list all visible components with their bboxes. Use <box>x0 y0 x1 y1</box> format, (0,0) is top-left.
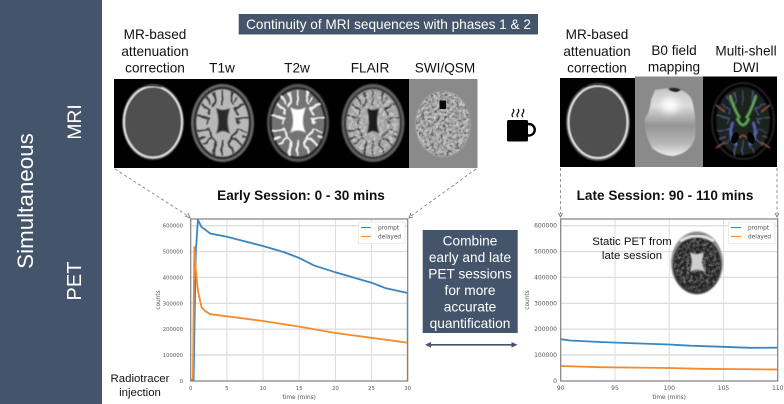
label: radiotracer injection <box>111 373 170 399</box>
late sequence labels: Multi-shell <box>715 44 777 58</box>
x axis ticks: 20 <box>332 386 339 392</box>
brain: FLAIR <box>342 84 404 162</box>
brain: attenuation correction <box>122 84 184 160</box>
label: static PET from late session: late session <box>602 250 662 262</box>
y axis ticks: 100000 <box>163 353 184 359</box>
x axis ticks <box>189 386 412 392</box>
label: radiotracer injection: injection <box>119 387 161 399</box>
x axis ticks: 110 <box>772 385 784 392</box>
early sequence labels: T1w <box>209 60 235 76</box>
y axis ticks: 300000 <box>163 301 184 307</box>
dashed connector arrows <box>115 168 779 218</box>
legend: prompt <box>748 226 770 232</box>
y axis ticks: 200000 <box>534 326 557 333</box>
x axis ticks: 100 <box>663 385 675 392</box>
chart: late session counts <box>525 219 784 401</box>
sidebar label: PET: PET <box>64 262 86 300</box>
y axis ticks: 200000 <box>163 327 184 333</box>
legend: prompt <box>378 226 400 232</box>
axis titles: counts <box>525 290 531 310</box>
x axis ticks: 95 <box>611 385 619 392</box>
callout: combine sessions: early and late <box>429 250 511 265</box>
y axis ticks <box>534 223 557 385</box>
early sequence labels: MR-based <box>124 27 186 42</box>
late sequence labels: MR-based <box>566 27 628 42</box>
late sequence labels: mapping <box>648 60 700 74</box>
y axis ticks: 400000 <box>534 274 557 281</box>
sidebar label: Simultaneous: Simultaneous <box>13 133 38 269</box>
late sequence labels: B0 field <box>651 43 697 58</box>
heading: early session: Early Session: 0 - 30 mins <box>217 188 385 203</box>
y axis ticks: 100000 <box>534 352 557 359</box>
prompt curve <box>191 220 408 381</box>
axis titles: time (mins) <box>652 395 686 401</box>
double-headed arrow <box>425 342 518 348</box>
legend <box>728 222 775 244</box>
axis titles <box>525 290 686 401</box>
early sequence labels: attenuation <box>121 44 189 59</box>
y axis ticks: 600000 <box>534 223 557 230</box>
brain: SWI/QSM <box>416 91 470 157</box>
label: static PET from late session: Static PET from <box>592 236 672 248</box>
brain: multi-shell DWI <box>712 83 774 159</box>
late MRI image strip <box>560 76 777 167</box>
early sequence labels: T2w <box>284 60 310 76</box>
axis titles: counts <box>156 290 162 310</box>
y axis ticks: 600000 <box>163 224 184 230</box>
early sequence labels: correction <box>125 60 185 76</box>
callout: combine sessions: PET sessions <box>428 266 512 282</box>
y axis ticks: 300000 <box>534 300 557 307</box>
early MRI image strip <box>114 79 478 168</box>
static PET brain image <box>671 232 723 294</box>
banner: continuity of MRI sequences <box>239 14 538 34</box>
y axis ticks: 0 <box>553 378 557 385</box>
axis titles <box>156 290 316 401</box>
late sequence labels: correction <box>567 60 627 76</box>
sidebar label: MRI: MRI <box>65 104 86 140</box>
legend <box>358 222 405 244</box>
late sequence labels: DWI <box>733 60 759 75</box>
x axis ticks <box>557 385 784 392</box>
heading: late session: Late Session: 90 - 110 mins <box>577 188 753 203</box>
early sequence labels: FLAIR <box>351 60 389 76</box>
x axis ticks: 90 <box>557 385 565 392</box>
delayed curve <box>561 366 778 370</box>
y axis ticks: 500000 <box>534 249 557 256</box>
label: radiotracer injection: Radiotracer <box>111 373 170 385</box>
y axis ticks: 400000 <box>163 275 184 281</box>
early sequence labels: SWI/QSM <box>415 60 475 76</box>
coffee break icon <box>507 109 535 142</box>
x axis ticks: 25 <box>368 386 375 392</box>
callout: combine sessions: Combine <box>443 234 497 248</box>
callout: combine sessions <box>423 230 518 333</box>
callout: combine sessions: for more <box>445 283 495 298</box>
legend: delayed <box>748 234 771 240</box>
x axis ticks: 15 <box>296 386 303 392</box>
y axis ticks: 0 <box>180 379 184 385</box>
delayed curve <box>191 246 408 381</box>
x axis ticks: 30 <box>404 386 412 392</box>
x axis ticks: 0 <box>189 386 193 392</box>
brain: B0 field map <box>645 88 696 156</box>
axis titles: time (mins) <box>282 395 316 401</box>
x axis ticks: 5 <box>225 386 229 392</box>
late sequence labels <box>563 27 777 76</box>
y axis ticks <box>163 224 184 385</box>
prompt curve <box>561 339 778 348</box>
label: static PET from late session <box>592 236 672 262</box>
late sequence labels: attenuation <box>563 44 631 59</box>
brain: T2w <box>267 84 329 162</box>
x axis ticks: 10 <box>260 386 267 392</box>
chart: early session counts <box>156 219 412 401</box>
banner: continuity of MRI sequences: Continuity of MRI sequences with phases 1 & 2 <box>246 17 531 32</box>
x axis ticks: 105 <box>718 385 729 392</box>
brain: T1w <box>191 84 254 162</box>
early sequence labels <box>121 27 475 76</box>
callout: combine sessions: quantification <box>430 316 510 331</box>
callout: combine sessions: accurate <box>444 300 496 314</box>
brain: attenuation correction late <box>566 83 630 161</box>
y axis ticks: 500000 <box>163 250 184 256</box>
sidebar panel <box>0 0 102 404</box>
legend: delayed <box>378 234 401 240</box>
